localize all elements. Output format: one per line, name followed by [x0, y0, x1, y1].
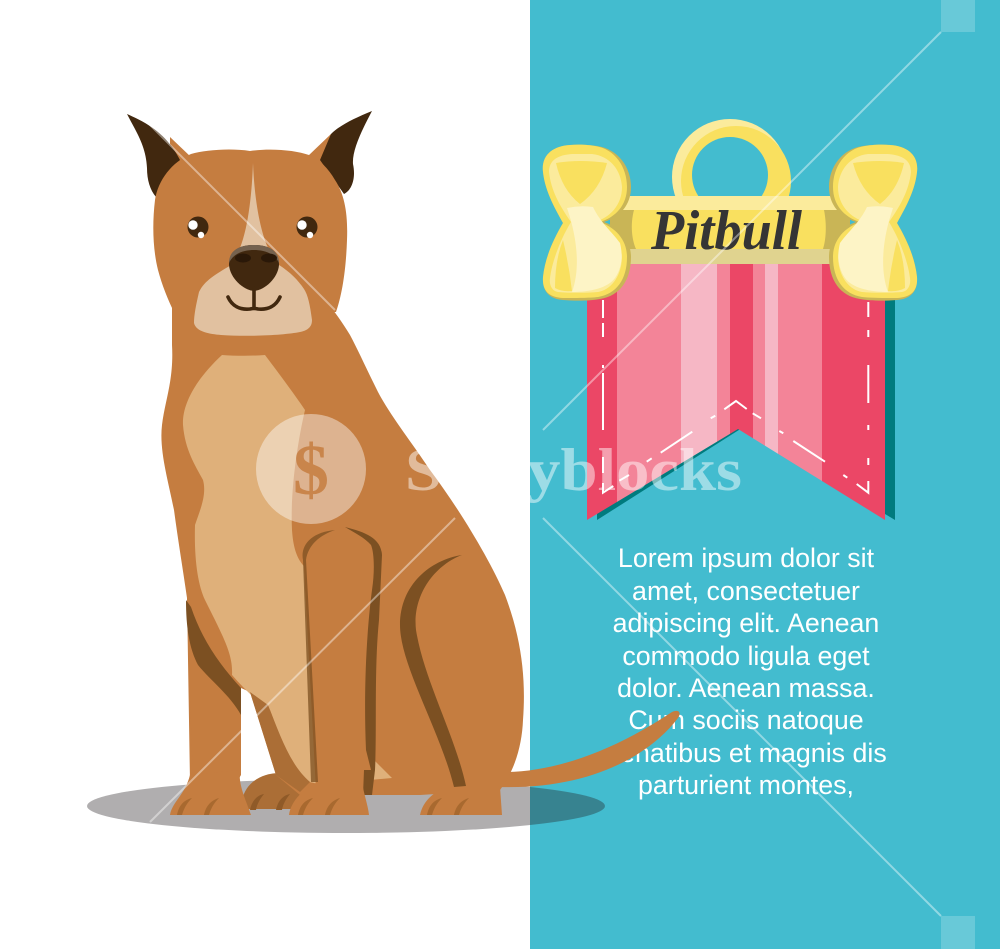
front left leg — [187, 595, 241, 780]
hind stripe — [400, 555, 466, 787]
mouth — [228, 288, 280, 309]
panel: blue side panel — [530, 0, 1000, 949]
left dark stripe — [186, 600, 241, 715]
body text: adipiscing elit. Aenean — [613, 608, 879, 638]
right ear — [320, 111, 372, 194]
watermark — [256, 0, 975, 949]
paw: front centre — [289, 782, 369, 815]
watermark badge: $ — [293, 430, 329, 510]
nose — [229, 245, 279, 291]
ribbon shadow — [597, 298, 895, 520]
body text — [605, 543, 887, 800]
body text: penatibus et magnis dis — [605, 738, 887, 768]
watermark corner tabs — [941, 0, 975, 949]
body text: dolor. Aenean massa. — [617, 673, 875, 703]
body text: Lorem ipsum dolor sit — [618, 543, 875, 573]
inner leg — [250, 692, 310, 792]
pitbull ribbon badge — [543, 119, 917, 523]
left eye — [188, 216, 208, 238]
body text: Cum sociis natoque — [628, 705, 864, 735]
bone bar — [610, 196, 850, 264]
head — [153, 150, 347, 312]
tail — [498, 711, 680, 787]
blaze — [240, 163, 268, 248]
foreleg right shading — [345, 527, 382, 770]
watermark wordmark: Storyblocks — [405, 437, 742, 503]
body text: commodo ligula eget — [622, 641, 870, 671]
chest — [183, 355, 392, 795]
body text: amet, consectetuer — [632, 576, 860, 606]
paw: rear — [420, 787, 502, 815]
left ear — [127, 114, 180, 197]
ear orange backs — [170, 134, 331, 175]
watermark lines — [145, 32, 941, 916]
right eye — [296, 216, 318, 238]
body text: parturient montes, — [638, 770, 854, 800]
foreleg — [304, 528, 378, 790]
lower fore shading — [363, 770, 375, 795]
bone left end — [543, 145, 631, 301]
paw: front left — [170, 770, 251, 815]
ground shadow — [87, 779, 605, 833]
body — [161, 300, 524, 795]
paw toes: back — [250, 794, 290, 810]
badge title: Pitbull — [650, 200, 802, 262]
foreleg left shading — [303, 530, 335, 782]
back left paw — [242, 773, 310, 809]
watermark badge — [256, 414, 366, 524]
bone right end — [829, 145, 917, 301]
ribbon stripes — [587, 263, 885, 523]
dog illustration — [127, 111, 680, 815]
ribbon stitching — [603, 300, 868, 493]
muzzle — [194, 265, 312, 336]
bone ring — [672, 119, 791, 236]
